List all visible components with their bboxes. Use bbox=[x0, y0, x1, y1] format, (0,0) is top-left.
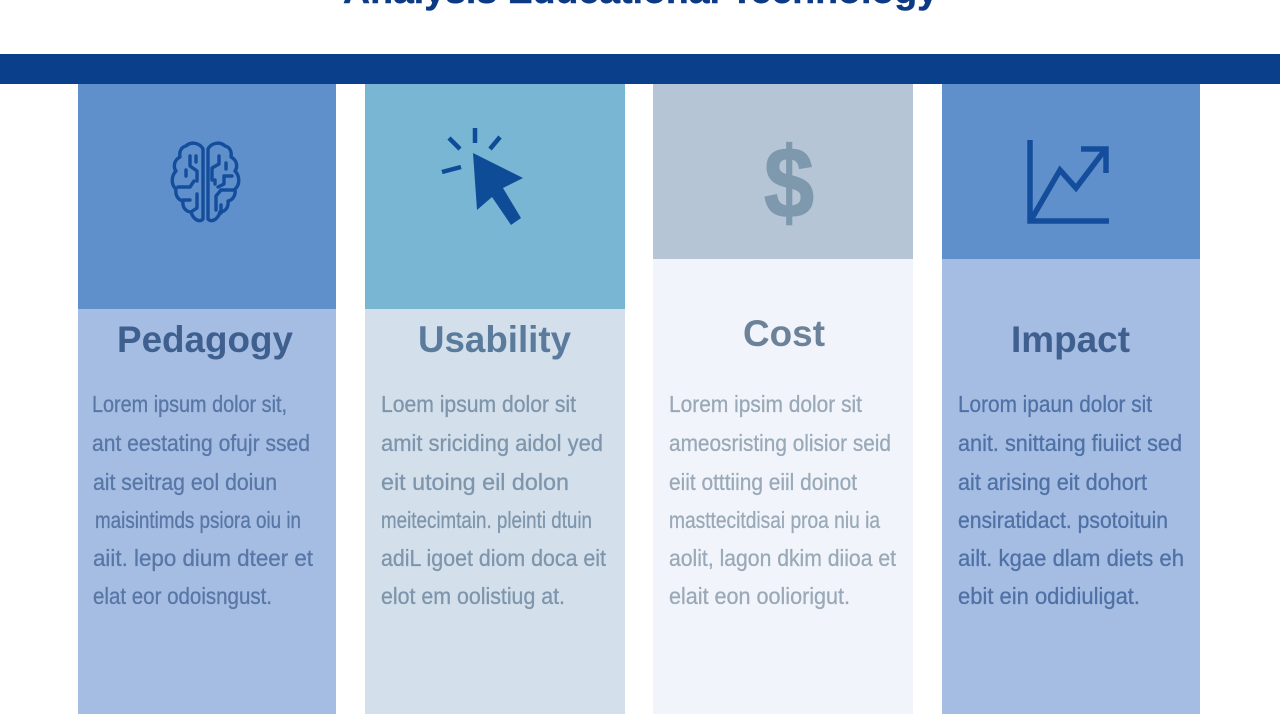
panel body: usability bbox=[365, 84, 625, 714]
text block: cost: ameosristing olisior seid bbox=[669, 430, 891, 456]
text block: impact: ebit ein odidiuligat. bbox=[958, 583, 1140, 609]
text block: cost: masttecitdisai proa niu ia bbox=[669, 507, 880, 533]
text block: usability: Loem ipsum dolor sit bbox=[381, 391, 577, 417]
text block: cost: Lorem ipsim dolor sit bbox=[669, 391, 863, 417]
icon background: impact bbox=[942, 84, 1200, 259]
heading: impact: Impact bbox=[1011, 319, 1130, 360]
text block: impact: ailt. kgae dlam diets eh bbox=[958, 545, 1184, 571]
icon: cursor click bbox=[442, 128, 523, 225]
icon background: cost bbox=[653, 84, 913, 259]
panel: pedagogy bbox=[78, 84, 336, 714]
text block: pedagogy: elat eor odoisngust. bbox=[93, 583, 272, 609]
icon background: usability bbox=[365, 84, 625, 309]
icon: growth chart bbox=[1030, 140, 1109, 221]
icon background: pedagogy bbox=[78, 84, 336, 309]
text block: cost: aolit, lagon dkim diioa et bbox=[669, 545, 897, 571]
heading: pedagogy: Pedagogy bbox=[117, 319, 293, 360]
panel: impact bbox=[942, 84, 1200, 714]
panel: usability bbox=[365, 84, 625, 714]
text block: pedagogy: Lorem ipsum dolor sit, bbox=[92, 391, 287, 417]
text block: cost: eiit otttiing eiil doinot bbox=[669, 469, 858, 495]
panel body: impact bbox=[942, 84, 1200, 714]
text block: impact bbox=[958, 391, 1184, 609]
text block: impact: ensiratidact. psotoituin bbox=[958, 507, 1168, 533]
icon: brain bbox=[172, 143, 239, 221]
text block: usability: eit utoing eil dolon bbox=[381, 469, 569, 495]
text block: usability: adiL igoet diom doca eit bbox=[381, 545, 607, 571]
text block: impact: anit. snittaing fiuiict sed bbox=[958, 430, 1182, 456]
icon: dollar sign: $ bbox=[764, 127, 814, 239]
text block: usability: amit sriciding aidol yed bbox=[381, 430, 603, 456]
text block: impact: ait arising eit dohort bbox=[958, 469, 1148, 495]
panel body: cost bbox=[653, 84, 913, 714]
panel body: pedagogy bbox=[78, 84, 336, 714]
text block: impact: Lorom ipaun dolor sit bbox=[958, 391, 1153, 417]
text block: pedagogy: ait seitrag eol doiun bbox=[93, 469, 277, 495]
heading: cost: Cost bbox=[743, 313, 825, 354]
text block: pedagogy: maisintimds psiora oiu in bbox=[95, 507, 301, 533]
panel: cost bbox=[653, 84, 913, 714]
text block: cost: elait eon ooliorigut. bbox=[669, 583, 850, 609]
text block: usability: meitecimtain. pleinti dtuin bbox=[381, 507, 592, 533]
text block: pedagogy bbox=[92, 391, 314, 609]
text block: cost bbox=[669, 391, 897, 609]
text block: pedagogy: aiit. lepo dium dteer et bbox=[93, 545, 314, 571]
heading: usability: Usability bbox=[418, 319, 571, 360]
text block: usability: elot em oolistiug at. bbox=[381, 583, 565, 609]
text block: pedagogy: ant eestating ofujr ssed bbox=[92, 430, 310, 456]
header bar bbox=[0, 54, 1280, 84]
text block: usability bbox=[381, 391, 607, 609]
